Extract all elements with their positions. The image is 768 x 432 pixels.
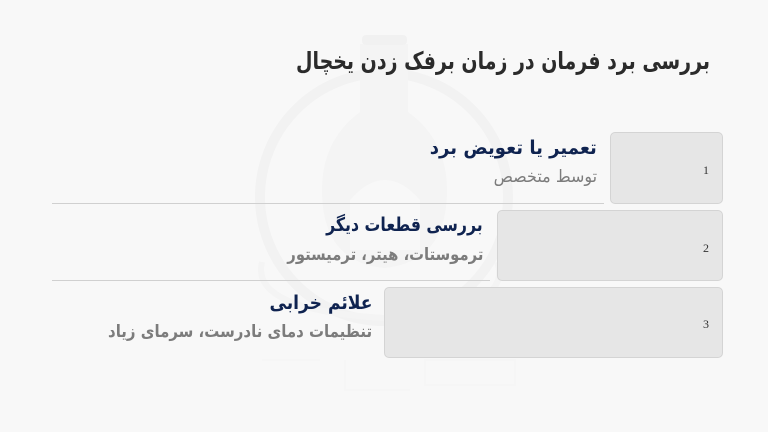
item 1 number box	[610, 132, 723, 204]
item 2 number box	[497, 210, 723, 281]
divider 2	[52, 280, 490, 281]
item 2 description: ترموستات، هیتر، ترمیستور	[287, 245, 483, 265]
item 2 heading: بررسی قطعات دیگر	[326, 214, 483, 236]
item 1 number box: 1	[703, 163, 709, 177]
panel: item 3	[108, 287, 723, 358]
item 3 description: تنظیمات دمای نادرست، سرمای زیاد	[108, 322, 372, 342]
panel: item 2	[286, 210, 723, 281]
item 3 number box: 3	[703, 317, 709, 331]
item 1 heading: تعمیر یا تعویض برد	[430, 137, 597, 159]
item 2 number box: 2	[703, 241, 709, 255]
item 3 heading: علائم خرابی	[269, 292, 372, 314]
item 1 description: توسط متخصص	[494, 167, 597, 187]
item 3 number box	[384, 287, 723, 358]
divider 1	[52, 203, 604, 204]
title: بررسی برد فرمان در زمان برفک زدن یخچال	[296, 47, 710, 75]
panel: item 1	[430, 132, 723, 204]
